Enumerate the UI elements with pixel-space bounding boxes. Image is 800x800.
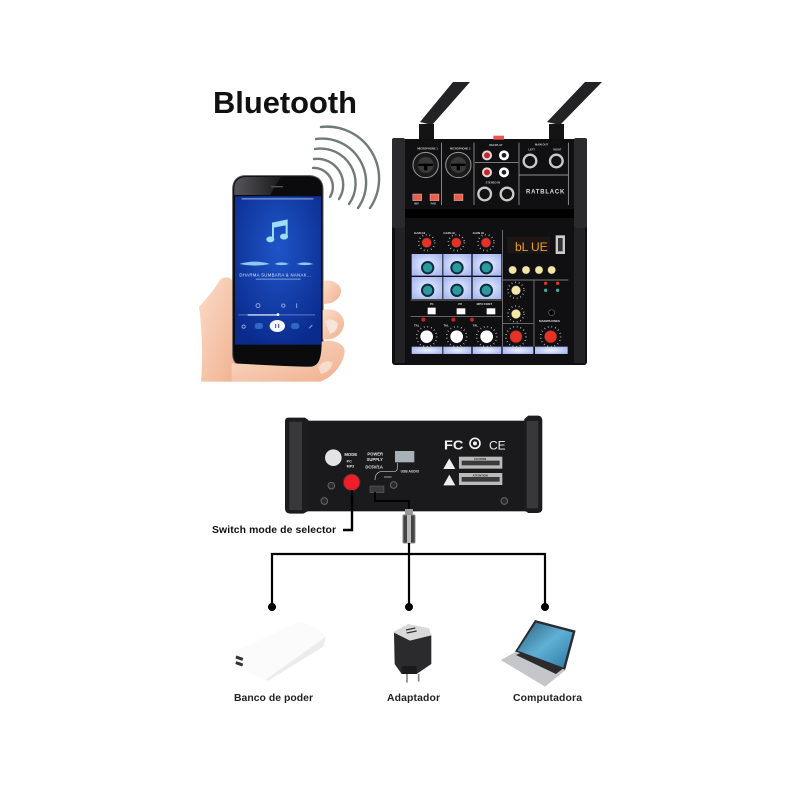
mode label: MODE <box>344 452 357 457</box>
panel labels: STEREO IN <box>486 180 500 184</box>
panel labels: MAIN OUT <box>535 142 548 146</box>
panel labels: MICROPHONE 1 <box>417 146 438 150</box>
fingers in front of phone <box>232 280 345 382</box>
bottom panel: bL UE <box>515 240 548 254</box>
usb diagram <box>375 451 420 480</box>
screws <box>321 482 508 504</box>
icon: power bank <box>235 622 326 681</box>
phone held in hand <box>199 176 345 382</box>
power supply label: SUPPLY <box>367 457 383 462</box>
brand logo: RATBLACK <box>526 189 565 195</box>
top panel <box>413 136 568 205</box>
icon: music note <box>266 219 288 242</box>
panel labels: LEFT <box>528 148 535 152</box>
antenna left <box>419 82 470 141</box>
warning triangles <box>443 458 455 485</box>
mixer front view <box>392 136 587 365</box>
mode label: MP3 <box>347 465 354 469</box>
red mode switch <box>343 474 360 491</box>
panel labels: MP3 FX/BT <box>477 302 492 306</box>
icon: bluetooth signal waves <box>313 127 379 208</box>
knob tick rings <box>417 235 561 347</box>
bottom panel <box>411 230 568 354</box>
white level knobs <box>420 330 493 343</box>
panel labels: TAL <box>443 324 449 328</box>
waveform <box>239 262 313 266</box>
white selector pads <box>428 308 495 314</box>
connector: switch to label <box>343 490 352 530</box>
mixer rear view <box>285 416 542 514</box>
blue channel strips <box>412 254 568 354</box>
song title text: DHARMA SUMBARA & NANAK... <box>239 273 311 278</box>
usb plug <box>403 509 415 543</box>
certification marks: FC <box>444 439 463 453</box>
panel labels: TAL <box>473 324 478 328</box>
display <box>507 237 550 253</box>
leds <box>421 282 559 322</box>
warning label: caution <box>459 457 502 469</box>
label: banco de poder: Banco de poder <box>234 693 313 704</box>
panel labels: P1 <box>430 302 434 306</box>
player controls <box>238 303 315 328</box>
red switches <box>413 194 463 201</box>
headphone jack <box>549 310 555 316</box>
jack sockets <box>478 155 563 200</box>
warning label: attention <box>459 473 502 485</box>
cream buttons <box>509 266 556 319</box>
panel labels: 48V <box>414 201 419 205</box>
red gain knobs <box>422 238 557 343</box>
panel labels: GAIN HI <box>414 231 425 235</box>
teal knobs <box>422 262 492 296</box>
label: switch mode de selector: Switch mode de selector <box>212 525 336 536</box>
panel labels: P2 <box>458 302 462 306</box>
usb port <box>370 486 384 493</box>
panel labels: PAD <box>431 201 436 205</box>
power supply label: DC5V/1A <box>365 465 383 470</box>
antenna right <box>547 82 602 141</box>
panel labels: MICROPHONE 2 <box>450 146 471 150</box>
ce mark: CE <box>489 438 506 452</box>
wiring to devices <box>268 543 549 611</box>
panel labels: REC/PLAY <box>489 143 503 147</box>
panel labels: GAIN HI <box>443 231 455 235</box>
warning label: attention: ATTENTION <box>473 473 488 477</box>
panel labels: RIGHT <box>553 148 562 152</box>
mode sticker <box>325 449 342 466</box>
warning label: caution: CAUTION <box>474 457 486 461</box>
panel labels <box>414 142 562 205</box>
panel labels <box>414 231 560 328</box>
phone screen <box>235 196 321 345</box>
power supply label: POWER <box>367 451 383 456</box>
csa mark <box>470 438 480 448</box>
mode label: PC <box>347 460 352 464</box>
rca jacks <box>482 150 509 177</box>
connector: port to plug <box>375 492 409 512</box>
label: computadora: Computadora <box>513 693 582 704</box>
usb port <box>556 235 565 254</box>
icon: adapter <box>394 624 431 683</box>
panel labels: MAIN/PHONES <box>539 319 560 323</box>
usb diagram: USB AUDIO <box>401 469 420 473</box>
label: adaptador: Adaptador <box>387 693 440 704</box>
title: Bluetooth: Bluetooth <box>213 85 357 120</box>
panel labels: GAIN HI <box>473 231 484 235</box>
phone body <box>233 176 323 367</box>
panel labels: TAL <box>414 324 420 328</box>
hand behind phone <box>199 277 238 382</box>
icon: laptop <box>501 620 576 687</box>
xlr inputs <box>413 152 471 178</box>
